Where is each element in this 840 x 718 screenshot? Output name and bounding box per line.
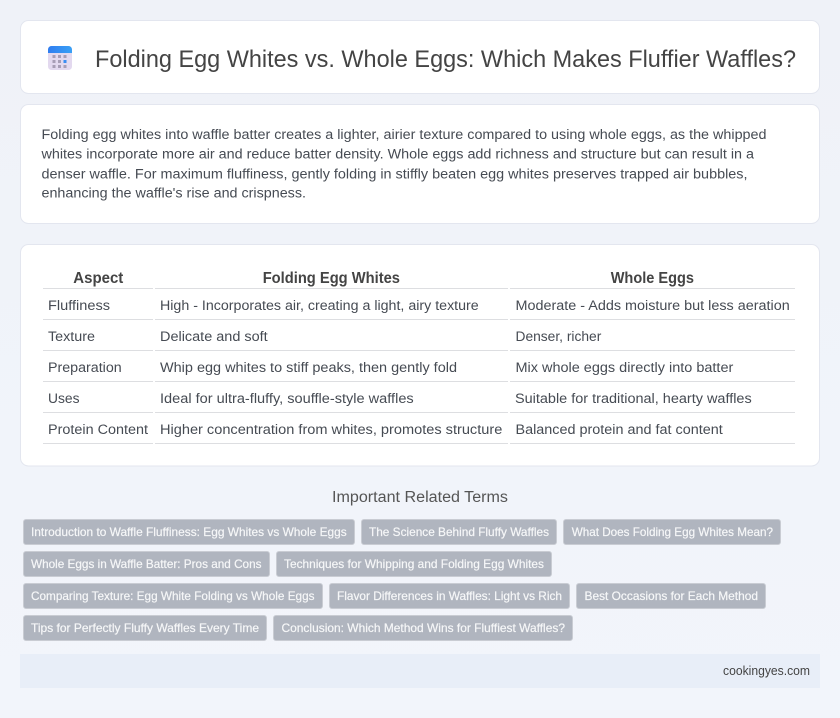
tag: Introduction to Waffle Fluffiness: Egg Whites vs Whole Eggs: [31, 525, 347, 539]
tag: [24, 584, 322, 608]
row: fluffiness: [48, 298, 790, 314]
row: protein content: Protein Content: [48, 422, 148, 438]
tag: [24, 616, 266, 640]
tag: [24, 552, 270, 576]
row: fluffiness: Fluffiness: [48, 298, 110, 314]
row: preparation: Mix whole eggs directly into batter: [516, 360, 734, 376]
intro text: enhancing the waffle's rise and crispness.: [42, 186, 306, 202]
intro text: denser waffle. For maximum fluffiness, gently folding in stiffly beaten egg whites preserves trapped air bubbles,: [42, 166, 748, 182]
tag: What Does Folding Egg Whites Mean?: [572, 525, 773, 539]
intro text: [40, 127, 766, 202]
header panel: [20, 20, 820, 94]
tag: [330, 584, 570, 608]
intro text: whites incorporate more air and reduce batter density. Whole eggs add richness and structure but can result in a: [40, 146, 754, 162]
footer: [20, 654, 820, 688]
table header row: Whole Eggs: [611, 270, 694, 287]
panel: comparison table: [20, 244, 820, 466]
row: preparation: Preparation: [48, 360, 122, 376]
panel: intro paragraph: [20, 104, 820, 224]
tag: [276, 552, 552, 576]
tag: Flavor Differences in Waffles: Light vs Rich: [337, 589, 562, 603]
footer source: cookingyes.com: [723, 664, 810, 678]
row: protein content: Higher concentration from whites, promotes structure: [160, 422, 502, 438]
row: uses: [48, 391, 752, 407]
row: protein content: Balanced protein and fat content: [516, 422, 723, 438]
row: texture: Texture: [48, 329, 95, 345]
row: protein content: [48, 422, 723, 438]
tag: Comparing Texture: Egg White Folding vs Whole Eggs: [31, 589, 314, 603]
row: texture: [48, 329, 602, 345]
tag: [564, 520, 780, 544]
tag: The Science Behind Fluffy Waffles: [369, 525, 549, 539]
tag: Techniques for Whipping and Folding Egg Whites: [284, 557, 544, 571]
icon: calendar: [48, 46, 72, 70]
table header row: [73, 270, 694, 287]
table header row: Aspect: [73, 270, 123, 287]
row: preparation: [48, 360, 734, 376]
row: uses: Ideal for ultra-fluffy, souffle-style waffles: [160, 391, 414, 407]
tag: Tips for Perfectly Fluffy Waffles Every Time: [31, 621, 259, 635]
tag: Best Occasions for Each Method: [584, 589, 758, 603]
row: texture: Denser, richer: [516, 329, 602, 345]
heading: related terms: Important Related Terms: [332, 489, 508, 506]
title: Folding Egg Whites vs. Whole Eggs: Which Makes Fluffier Waffles?: [95, 46, 796, 73]
related term tags: [24, 520, 780, 640]
table header row: Folding Egg Whites: [263, 270, 400, 287]
row: uses: Suitable for traditional, hearty waffles: [515, 391, 752, 407]
tag: [24, 520, 354, 544]
row: fluffiness: Moderate - Adds moisture but less aeration: [516, 298, 790, 314]
tag: [362, 520, 556, 544]
tag: Conclusion: Which Method Wins for Fluffiest Waffles?: [282, 621, 565, 635]
row: preparation: Whip egg whites to stiff peaks, then gently fold: [160, 360, 457, 376]
row: texture: Delicate and soft: [160, 329, 268, 345]
tag: Whole Eggs in Waffle Batter: Pros and Cons: [31, 557, 262, 571]
tag: [576, 584, 766, 608]
intro text: Folding egg whites into waffle batter creates a lighter, airier texture compared to using whole eggs, as the whipped: [42, 127, 766, 143]
row: uses: Uses: [48, 391, 80, 407]
row: fluffiness: High - Incorporates air, creating a light, airy texture: [160, 298, 479, 314]
tag: [274, 616, 572, 640]
